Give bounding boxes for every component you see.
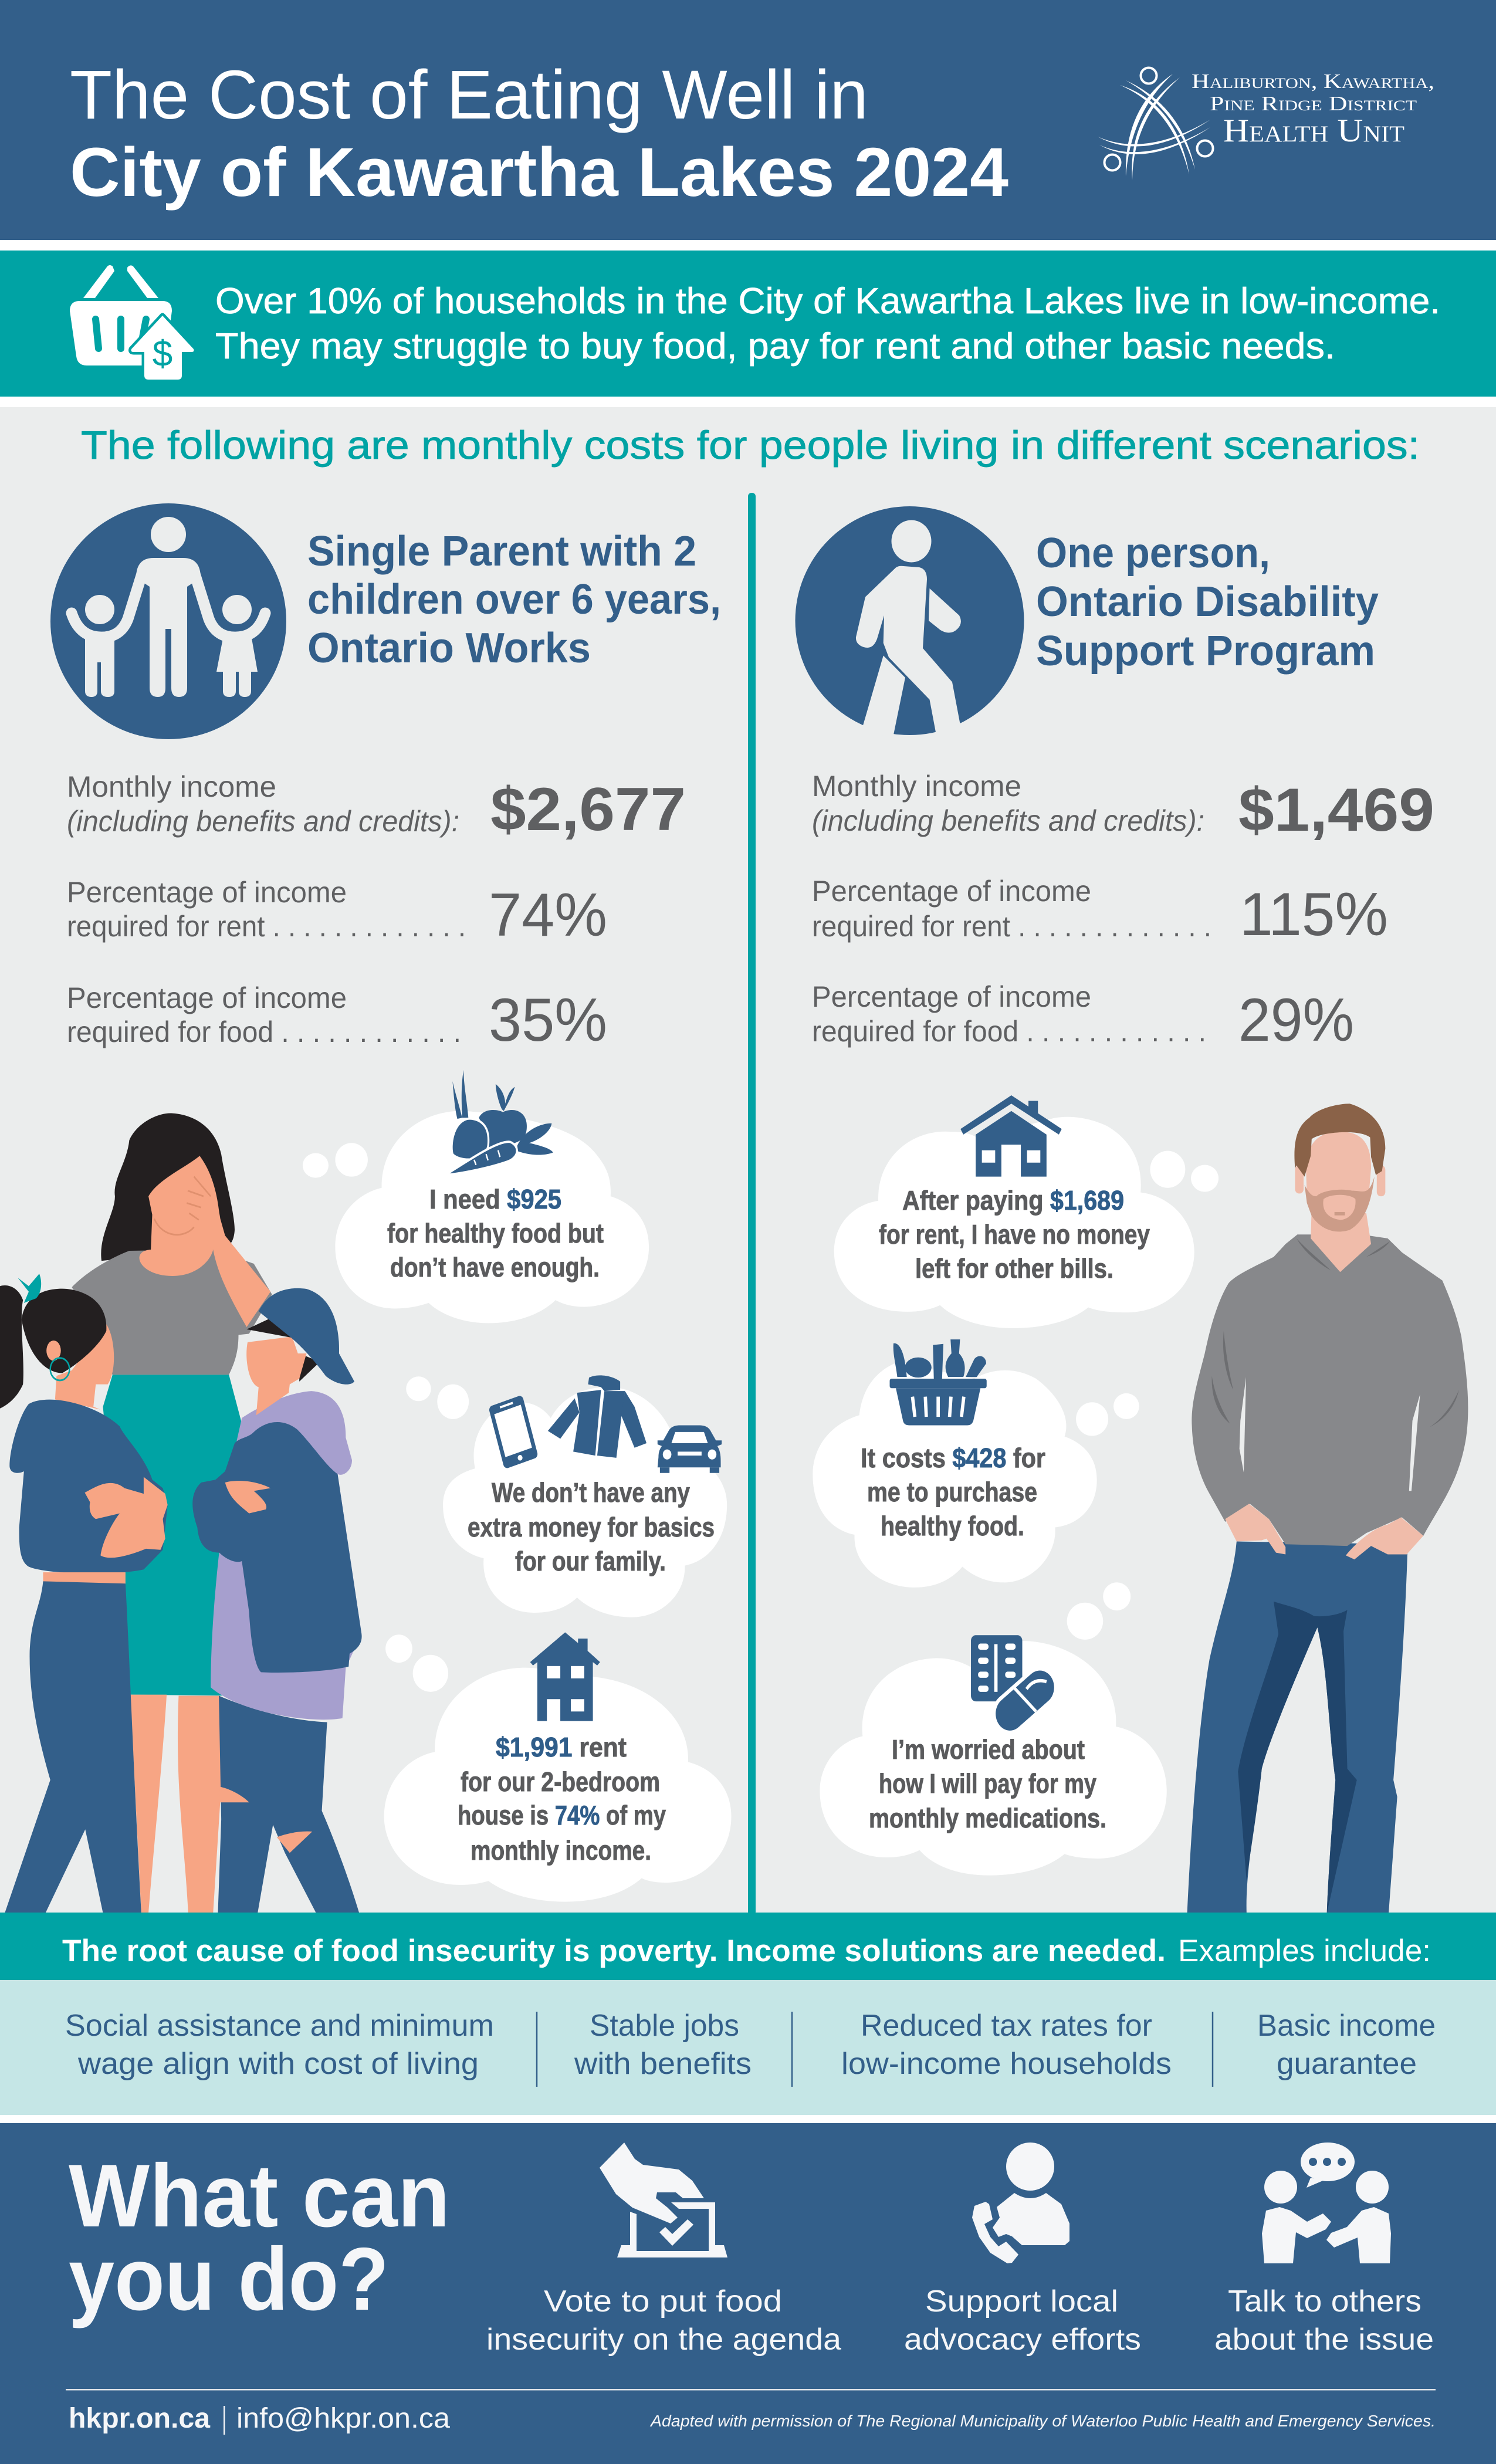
solution: social assistance [65, 2009, 494, 2081]
bubble text: food [387, 1184, 604, 1282]
stat: rent percentage: 74% [489, 881, 607, 949]
stat: rent percentage: Percentage of income [812, 875, 1091, 908]
icon: house [960, 1095, 1062, 1177]
cloud: food [813, 1362, 1139, 1588]
heading: one person: Support Program [1036, 628, 1375, 675]
bubble text: basics: extra money for basics [468, 1512, 715, 1542]
stat: food percentage: required for food . . . . . . . . . . . . [67, 1016, 461, 1048]
icon: vegetables [445, 1070, 553, 1175]
icon: basket with rising price arrow: $ [153, 334, 172, 374]
logo text: Haliburton, Kawartha, [1192, 70, 1434, 93]
stat: monthly income: (including benefits and credits): [67, 805, 459, 838]
bubble text: rent: monthly income. [471, 1835, 651, 1866]
panel: what can you do [0, 2123, 1496, 2464]
panel: income solutions [0, 1980, 1496, 2115]
thought bubble: medications [820, 1582, 1167, 1876]
panel: header [0, 0, 1496, 240]
solution: reduced tax rates: Reduced tax rates for [861, 2009, 1152, 2043]
action: talk: about the issue [1214, 2323, 1434, 2357]
icon: two people talking [1262, 2143, 1391, 2263]
thought bubble: food [813, 1339, 1139, 1588]
action: support [904, 2284, 1141, 2357]
panel: single parent scenario [0, 503, 731, 1913]
panel: low-income banner [0, 251, 1496, 397]
banner text: Over 10% of households in the City of Kawartha Lakes live in low-income. [215, 281, 1440, 321]
banner text: They may struggle to buy food, pay for rent and other basic needs. [215, 326, 1335, 367]
bubble text: rent: for our 2-bedroom [461, 1766, 660, 1797]
bubble text: rent: After paying $1,689 [902, 1185, 1124, 1216]
icon: pills [971, 1635, 1047, 1714]
icon: person on telephone [972, 2143, 1069, 2263]
icon: grocery basket [890, 1339, 987, 1425]
heading: what can you do: What can [69, 2146, 450, 2246]
heading: single parent: children over 6 years, [307, 576, 721, 623]
bubble text: medications: I’m worried about [892, 1734, 1085, 1765]
solution: stable jobs: with benefits [574, 2047, 752, 2081]
heading: scenarios: The following are monthly costs for people living in different scenarios: [81, 423, 1420, 468]
panel: root cause band [0, 1913, 1496, 1980]
bubble text: food: for healthy food but [387, 1218, 604, 1248]
action: vote: Vote to put food [544, 2284, 782, 2319]
panel: scenario divider [748, 493, 756, 1915]
heading: single parent [307, 528, 721, 672]
heading: what can you do: you do? [69, 2229, 389, 2329]
action: talk: Talk to others [1228, 2284, 1421, 2319]
heading: one person: One person, [1036, 530, 1270, 577]
stat: rent percentage [67, 876, 607, 949]
title: The Cost of Eating Well in [70, 56, 868, 134]
title [70, 56, 1008, 211]
icon: parent with two children [50, 503, 286, 739]
heading: single parent: Ontario Works [307, 625, 591, 672]
bubble text: basics: for our family. [515, 1546, 666, 1576]
action: talk [1214, 2284, 1434, 2357]
bubble text: basics [468, 1477, 715, 1576]
thought bubble: food [303, 1070, 649, 1323]
stat: rent percentage: 115% [1240, 881, 1388, 949]
cloud: rent [384, 1634, 731, 1902]
stat: food percentage: Percentage of income [67, 981, 347, 1014]
illustration: mother with two children [0, 1113, 362, 1913]
logo text: Pine Ridge District [1210, 92, 1417, 115]
stat: food percentage: 29% [1238, 986, 1354, 1054]
solution: stable jobs [574, 2009, 752, 2081]
footer contact: hkpr.on.ca [69, 2403, 210, 2434]
bubble text: rent [458, 1732, 666, 1866]
solution: basic income [1257, 2009, 1436, 2081]
stat: rent percentage: Percentage of income [67, 876, 347, 909]
stat: rent percentage: required for rent . . . . . . . . . . . . . [812, 910, 1211, 943]
icon: logo mark [1098, 68, 1213, 180]
action: vote: insecurity on the agenda [486, 2323, 841, 2357]
stat: monthly income [812, 770, 1434, 844]
thought bubble: basics [406, 1375, 727, 1617]
bubble text: rent [879, 1185, 1150, 1284]
heading: one person [1036, 530, 1379, 675]
icon: phone, jacket and car [488, 1375, 722, 1473]
cloud: medications [820, 1582, 1167, 1876]
action: support: Support local [925, 2284, 1118, 2319]
logo text [1192, 70, 1434, 149]
bubble text: food: I need $925 [429, 1184, 561, 1214]
cloud: basics [406, 1376, 727, 1617]
solution: social assistance: Social assistance and minimum [65, 2009, 494, 2043]
bubble text: food: It costs $428 for [861, 1443, 1045, 1473]
bubble text: medications [869, 1734, 1106, 1833]
bubble text: rent: left for other bills. [915, 1253, 1113, 1284]
stat: rent percentage: required for rent . . . . . . . . . . . . . [67, 910, 466, 943]
root cause text: The root cause of food insecurity is poverty. Income solutions are needed. [62, 1934, 1166, 1968]
bubble text: rent: house is 74% of my [458, 1800, 666, 1830]
bubble text: food: healthy food. [881, 1511, 1024, 1541]
stat: food percentage: 35% [489, 986, 607, 1054]
solution: stable jobs: Stable jobs [590, 2009, 739, 2043]
stat: monthly income: $2,677 [490, 776, 686, 844]
heading: single parent: Single Parent with 2 [307, 528, 696, 575]
heading: what can you do [69, 2146, 450, 2329]
bubble text: basics: We don’t have any [492, 1477, 690, 1508]
bubble text: food: don’t have enough. [390, 1252, 600, 1282]
stat: monthly income: (including benefits and credits): [812, 804, 1204, 837]
banner text [215, 281, 1440, 367]
stat: food percentage: Percentage of income [812, 980, 1091, 1013]
icon: basket with rising price arrow [70, 265, 194, 380]
stat: food percentage [812, 980, 1354, 1054]
logo text: Health Unit [1223, 113, 1404, 149]
footer contact [69, 2403, 450, 2435]
root cause text: Examples include: [1178, 1934, 1431, 1968]
footer credit: Adapted with permission of The Regional Municipality of Waterloo Public Health and Emergency Services. [649, 2412, 1436, 2430]
icon: two-storey house [530, 1632, 600, 1722]
panel: scenarios background [0, 407, 1496, 1915]
solution: social assistance: wage align with cost of living [77, 2047, 479, 2081]
bubble text: medications: monthly medications. [869, 1803, 1106, 1833]
stat: monthly income [67, 770, 686, 844]
bubble text: food [861, 1443, 1045, 1541]
logo: health unit [1098, 68, 1434, 180]
footer contact: info@hkpr.on.ca [236, 2403, 450, 2434]
icon: hand voting at ballot box [600, 2143, 727, 2257]
illustration: man in hoodie [1187, 1104, 1468, 1913]
solution: basic income: Basic income [1257, 2009, 1436, 2043]
solution: reduced tax rates [841, 2009, 1172, 2081]
bubble text: rent: $1,991 rent [496, 1732, 627, 1762]
action: support: advocacy efforts [904, 2323, 1141, 2357]
bubble text: medications: how I will pay for my [879, 1768, 1096, 1799]
panel: disability support scenario [796, 506, 1468, 1913]
action: vote [486, 2284, 841, 2357]
title: City of Kawartha Lakes 2024 [70, 134, 1008, 211]
solution: basic income: guarantee [1277, 2047, 1417, 2081]
cloud: food [303, 1111, 649, 1323]
icon: walking person [796, 506, 1024, 739]
cloud: rent [834, 1117, 1219, 1328]
stat: rent percentage [812, 875, 1388, 949]
bubble text: rent: for rent, I have no money [879, 1219, 1150, 1250]
stat: food percentage [67, 981, 607, 1054]
stat: monthly income: Monthly income [67, 770, 276, 803]
stat: monthly income: $1,469 [1238, 776, 1434, 844]
bubble text: food: me to purchase [867, 1477, 1037, 1507]
heading: one person: Ontario Disability [1036, 578, 1379, 625]
thought bubble: rent [834, 1095, 1219, 1328]
thought bubble: rent [384, 1632, 731, 1902]
stat: food percentage: required for food . . . . . . . . . . . . [812, 1015, 1206, 1048]
solution: reduced tax rates: low-income households [841, 2047, 1172, 2081]
stat: monthly income: Monthly income [812, 770, 1021, 803]
